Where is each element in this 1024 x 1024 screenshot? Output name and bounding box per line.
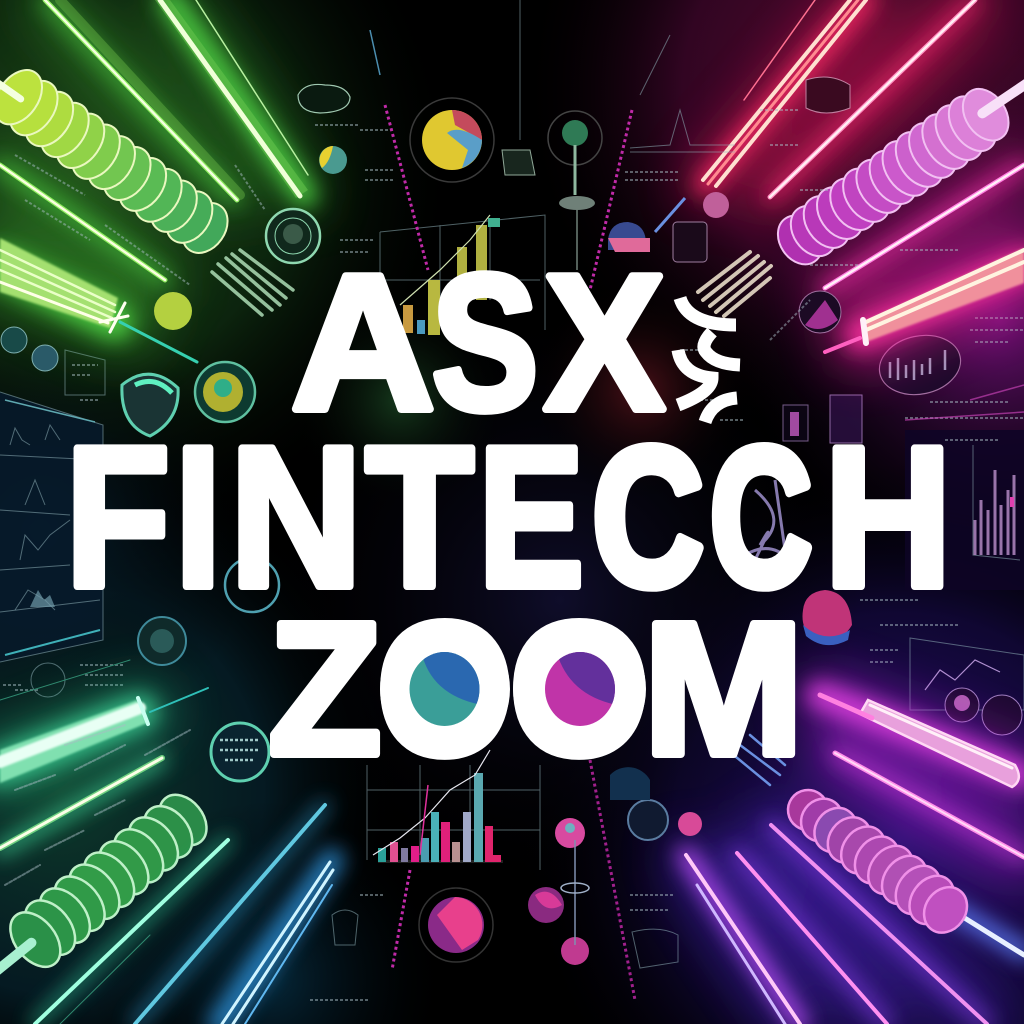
icon: magenta and violet pie inside second O	[545, 652, 615, 726]
icon: teal and blue pie inside first O	[410, 652, 480, 726]
icon: right side ornament and swirl	[528, 480, 852, 965]
coil: magenta spiral bottom right	[777, 777, 977, 943]
tube: pink neon lines top right	[703, 0, 1024, 352]
coil: green spiral top left	[0, 53, 239, 264]
title: FINTECCH: C	[592, 407, 704, 626]
dotted guides	[385, 105, 635, 1000]
coil: magenta spiral top right	[767, 59, 1024, 276]
pie chart: top centre	[410, 98, 494, 182]
coil: green spiral bottom left	[0, 783, 218, 998]
title: ZOOM: O	[377, 584, 513, 795]
title: FINTECCH: I	[175, 406, 221, 629]
title: ASX: X	[544, 234, 665, 450]
tube: green neon lines top left	[0, 0, 308, 362]
line art: bottom details	[310, 895, 678, 1000]
line chart and bars: top centre	[380, 215, 545, 340]
title: ZOOM: M	[643, 584, 804, 795]
icon: ampersand glyph	[678, 298, 740, 422]
line art: top schematic details	[15, 0, 960, 285]
title: FINTECCH: E	[478, 406, 584, 629]
pie chart: bottom pink	[419, 888, 493, 962]
title: ZOOM	[268, 584, 804, 795]
title: ZOOM: Z	[268, 584, 382, 795]
title: ASX: S	[432, 234, 538, 450]
title: FINTECCH: T	[365, 406, 474, 629]
tube: teal and blue neon lines bottom	[35, 805, 333, 1024]
title: FINTECCH	[66, 406, 952, 629]
title: FINTECCH: F	[66, 406, 170, 629]
decor: streaks near title	[212, 250, 771, 316]
title: ZOOM: O	[510, 584, 649, 795]
title: FINTECCH: N	[230, 406, 362, 629]
title: ASX	[291, 234, 665, 450]
tube: green and teal neon lines bottom left	[0, 660, 208, 885]
title: FINTECCH: H	[824, 406, 952, 629]
bar chart: bottom centre	[367, 750, 540, 870]
panel: left dashboard charts	[0, 350, 125, 697]
icon: right side orbs and glyphs	[608, 192, 841, 450]
icon: glass orbs left	[1, 146, 347, 781]
panel: right dashboard charts	[783, 318, 1024, 735]
title: ASX: A	[291, 234, 435, 450]
icon: lamp globe top centre	[502, 111, 602, 270]
title: FINTECCH: C	[710, 407, 812, 626]
tube: violet and pink neon lines bottom right	[686, 695, 1024, 1024]
